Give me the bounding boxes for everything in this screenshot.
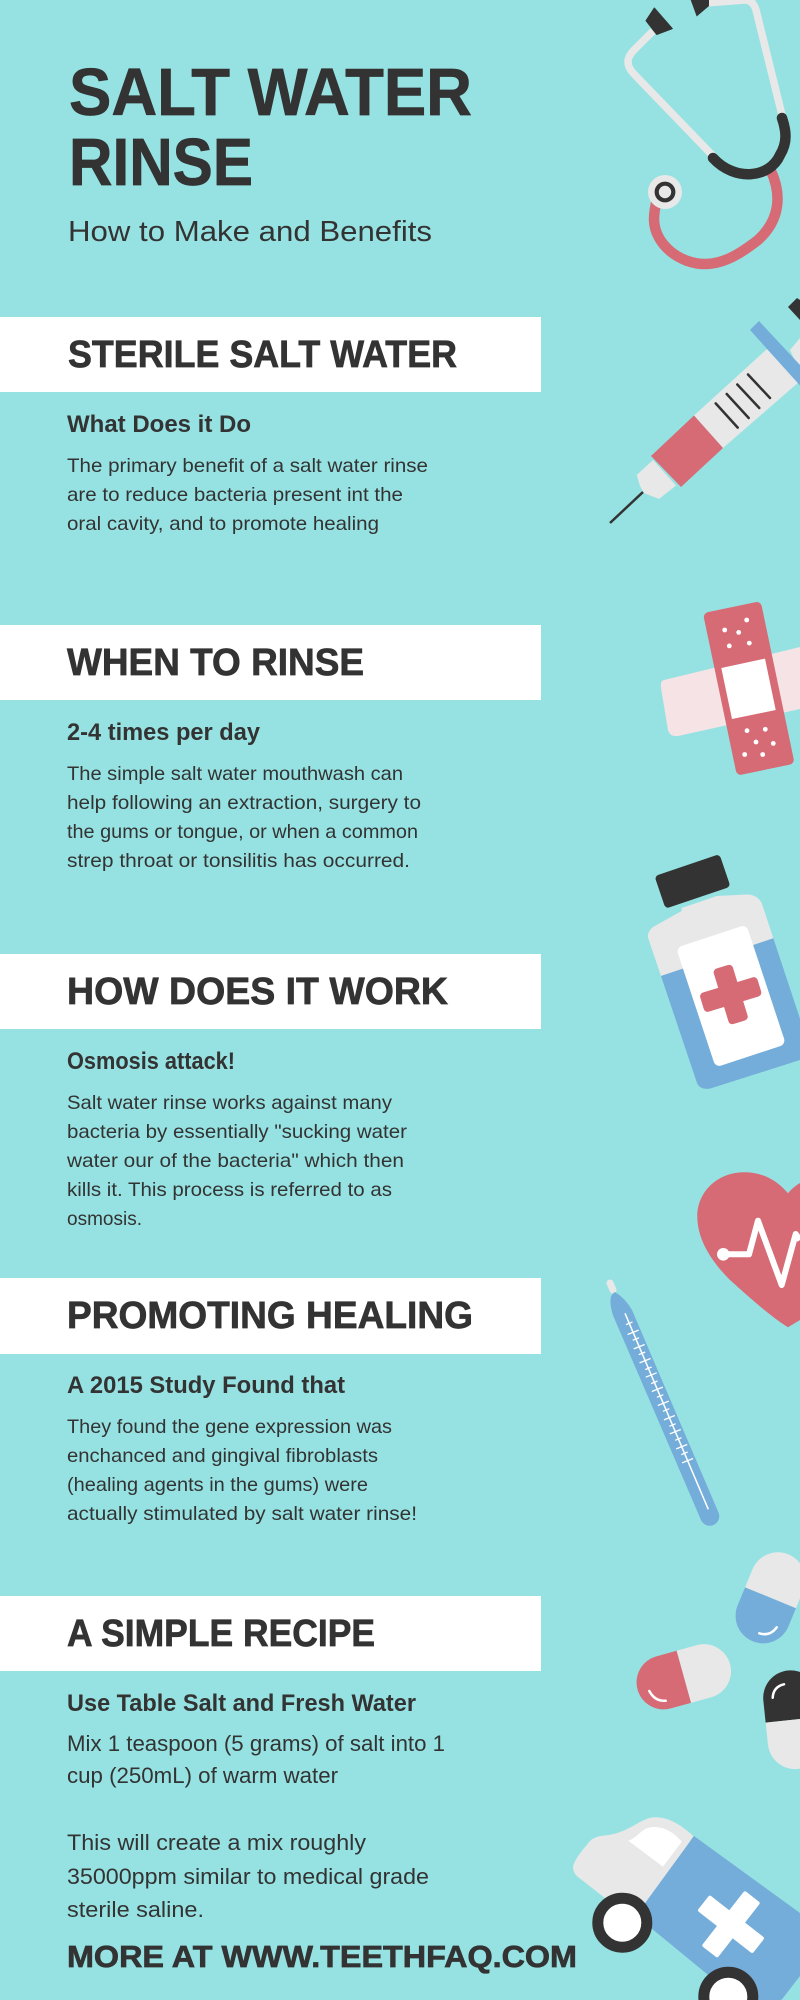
icon: stethoscope	[628, 0, 786, 264]
heading: a simple recipe: A SIMPLE RECIPE	[67, 1613, 375, 1655]
text block: benefit: are to reduce bacteria present int the	[67, 484, 403, 506]
subtitle: How to Make and Benefits	[68, 216, 432, 248]
text block: study: enchanced and gingival fibroblasts	[67, 1445, 378, 1467]
text block: study: actually stimulated by salt water rinse!	[67, 1503, 417, 1525]
subheading: 2015 study: A 2015 Study Found that	[67, 1372, 345, 1399]
text block: osmosis: bacteria by essentially "sucking water	[67, 1121, 408, 1143]
icon: dark pill	[760, 1668, 800, 1772]
text block: when	[67, 763, 421, 872]
panel: a simple recipe	[0, 1596, 541, 1922]
text block: study: (healing agents in the gums) were	[67, 1474, 368, 1496]
text block: osmosis: kills it. This process is referred to as	[67, 1179, 392, 1201]
panel: how does it work	[0, 954, 541, 1230]
title: RINSE	[69, 125, 253, 200]
subheading: times per day: 2-4 times per day	[67, 719, 261, 746]
heading: when to rinse: WHEN TO RINSE	[67, 642, 364, 684]
text block: recipe	[67, 1731, 445, 1922]
text block: recipe: Mix 1 teaspoon (5 grams) of salt into 1	[67, 1731, 445, 1756]
icon: pink pill	[630, 1638, 737, 1716]
text block: study	[67, 1416, 417, 1525]
icon: ambulance	[573, 1817, 800, 2000]
text block: recipe: 35000ppm similar to medical grade	[67, 1864, 429, 1889]
heading: sterile salt water: STERILE SALT WATER	[68, 334, 457, 376]
heading: sterile salt water	[0, 317, 541, 392]
heading: promoting healing: PROMOTING HEALING	[67, 1295, 473, 1337]
icon: medicine bottle	[648, 854, 800, 1089]
text block: recipe: sterile saline.	[67, 1897, 204, 1922]
text block: when: strep throat or tonsilitis has occurred.	[67, 850, 410, 872]
icon: blue pill	[727, 1544, 800, 1652]
heading: a simple recipe	[0, 1596, 541, 1671]
text block: benefit: The primary benefit of a salt water rinse	[67, 455, 428, 477]
subheading: osmosis attack: Osmosis attack!	[67, 1048, 235, 1075]
text block: osmosis	[66, 1092, 408, 1230]
text block: osmosis: Salt water rinse works against many	[67, 1092, 392, 1114]
heading: promoting healing	[0, 1278, 541, 1354]
footer link: MORE AT WWW.TEETHFAQ.COM	[67, 1939, 577, 1974]
text block: recipe: cup (250mL) of warm water	[67, 1763, 338, 1788]
text block: when: The simple salt water mouthwash can	[67, 763, 403, 785]
icon: thermometer	[610, 1283, 719, 1526]
title	[69, 55, 472, 200]
text block: benefit	[67, 455, 428, 535]
icon: bandage	[661, 601, 800, 776]
heading: how does it work	[0, 954, 541, 1029]
icon: heart with pulse	[697, 1172, 800, 1327]
panel: sterile salt water	[0, 317, 541, 535]
text block: osmosis: water our of the bacteria" which then	[66, 1150, 404, 1172]
text block: study: They found the gene expression was	[67, 1416, 392, 1438]
text block: when: help following an extraction, surgery to	[67, 792, 421, 814]
icon: syringe	[610, 298, 800, 523]
text block: recipe: This will create a mix roughly	[67, 1830, 366, 1855]
heading: how does it work: HOW DOES IT WORK	[67, 971, 449, 1013]
subheading: what does it do: What Does it Do	[67, 411, 251, 438]
text block: when: the gums or tongue, or when a common	[67, 821, 418, 843]
text block: osmosis: osmosis.	[67, 1208, 142, 1230]
heading: when to rinse	[0, 625, 541, 700]
panel: promoting healing	[0, 1278, 541, 1525]
subheading: table salt: Use Table Salt and Fresh Water	[67, 1690, 416, 1717]
title: SALT WATER	[69, 55, 472, 130]
panel: when to rinse	[0, 625, 541, 872]
text block: benefit: oral cavity, and to promote healing	[67, 513, 379, 535]
